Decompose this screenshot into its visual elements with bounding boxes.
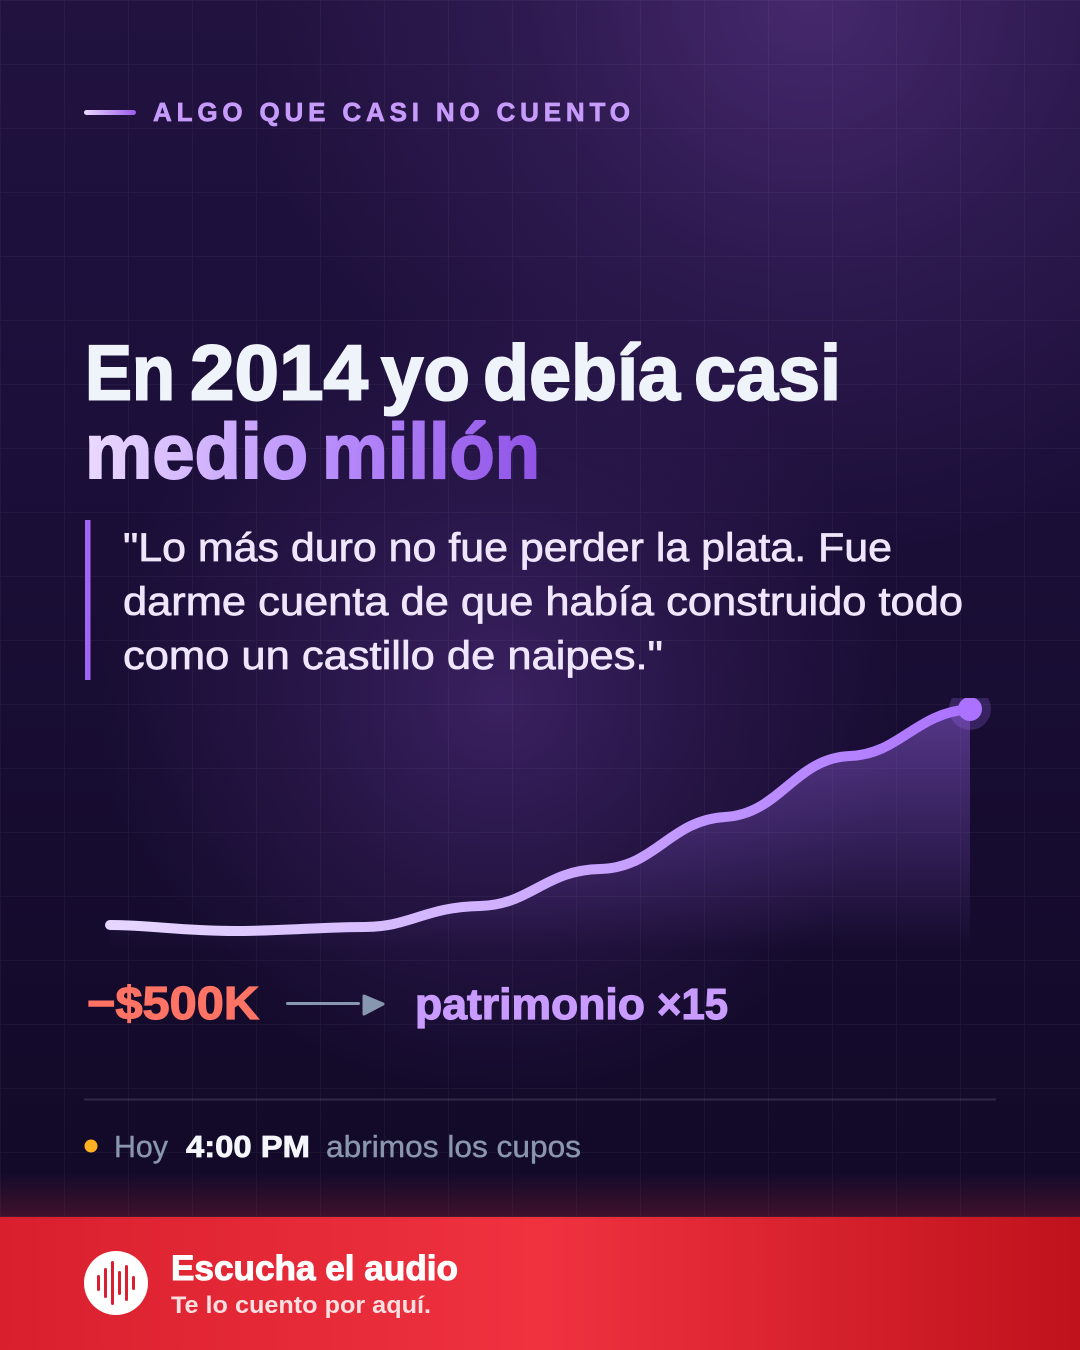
chart end point halo: [949, 698, 991, 730]
chart end point: [958, 697, 982, 721]
quote text: "Lo más duro no fue perder la plata. Fue: [123, 526, 892, 570]
title line 2: medio: [85, 407, 308, 495]
footer subheading: Te lo cuento por aquí.: [171, 1292, 431, 1319]
after value: patrimonio: [415, 980, 645, 1029]
schedule: [84, 1129, 581, 1164]
arrow: [286, 996, 383, 1014]
footer heading: Escucha el audio: [171, 1249, 458, 1288]
divider: [84, 1098, 996, 1100]
schedule text: Hoy: [114, 1129, 168, 1164]
eyebrow accent line: [84, 110, 136, 115]
schedule: abrimos los cupos: [326, 1129, 581, 1164]
quote bar: [85, 520, 90, 680]
eyebrow: [84, 97, 630, 127]
chart area fill: [412, 716, 970, 926]
eyebrow text: ALGO QUE CASI NO CUENTO: [153, 97, 630, 127]
icon: audio waveform: [84, 1251, 148, 1315]
before value: −$500K: [87, 977, 259, 1029]
quote: [85, 520, 963, 680]
title line 1: debía: [483, 328, 681, 416]
status dot: [84, 1140, 98, 1152]
title line 1: En: [85, 328, 175, 416]
quote text: como un castillo de naipes.": [123, 634, 663, 678]
chart line: [110, 709, 970, 931]
quote text: [123, 526, 963, 678]
title line 1: 2014: [190, 328, 368, 416]
title line 2: millón: [322, 407, 540, 495]
quote text: darme cuenta de que había construido todo: [123, 580, 963, 624]
footer banner: [0, 1217, 1080, 1350]
after value: ×15: [657, 980, 728, 1029]
title: [85, 328, 841, 495]
schedule: 4:00 PM: [186, 1129, 310, 1164]
title line 1: yo: [381, 328, 470, 416]
line chart: [105, 698, 991, 936]
title line 1: casi: [694, 328, 841, 416]
